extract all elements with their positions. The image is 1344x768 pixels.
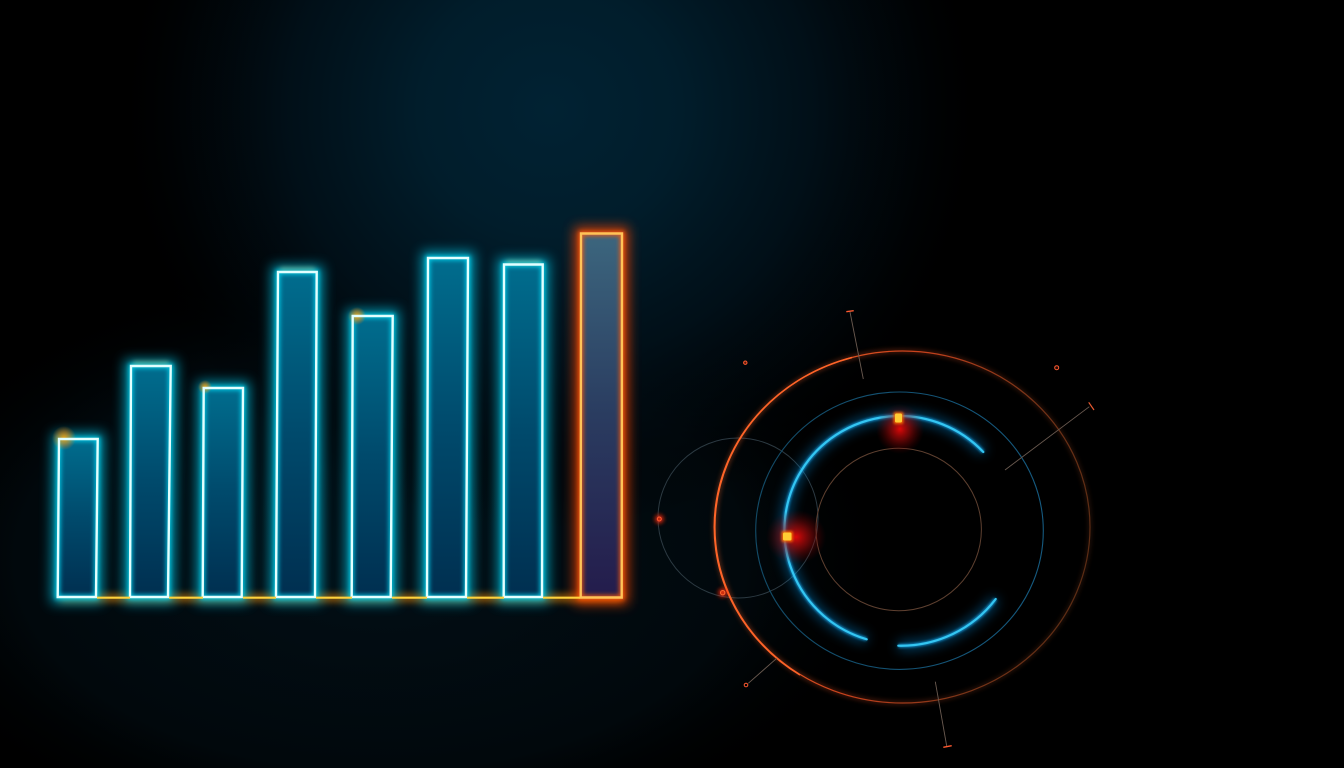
bar 7 [504, 262, 543, 597]
orbital diagram [655, 311, 1094, 747]
marker dot: left [655, 514, 664, 524]
node: top [876, 404, 924, 454]
marker dot: upper right [1055, 366, 1059, 370]
satellite grey circle [658, 438, 818, 598]
marker dot: upper left [744, 361, 747, 364]
bar 2 [130, 363, 171, 597]
baseline segments between bars [97, 597, 580, 599]
bar 4 [276, 269, 317, 597]
marker dot: lower left [718, 588, 727, 597]
thin blue ring [756, 392, 1043, 669]
callout line: right [1005, 402, 1094, 470]
bar 1 [52, 426, 98, 597]
outer orange ring [714, 351, 1090, 703]
callout line: top [846, 311, 863, 379]
baseline glow [60, 595, 622, 601]
bar chart [52, 234, 622, 598]
callout line: bottom left [744, 658, 777, 687]
node: left [766, 510, 826, 564]
bar 6 [427, 258, 468, 597]
inner brown ring [816, 448, 981, 611]
bar 8: highlighted orange bar [581, 234, 622, 598]
bar 3 [198, 380, 243, 597]
bar 5 [348, 307, 393, 597]
callout line: bottom [935, 682, 952, 747]
bright blue arcs [784, 416, 996, 646]
